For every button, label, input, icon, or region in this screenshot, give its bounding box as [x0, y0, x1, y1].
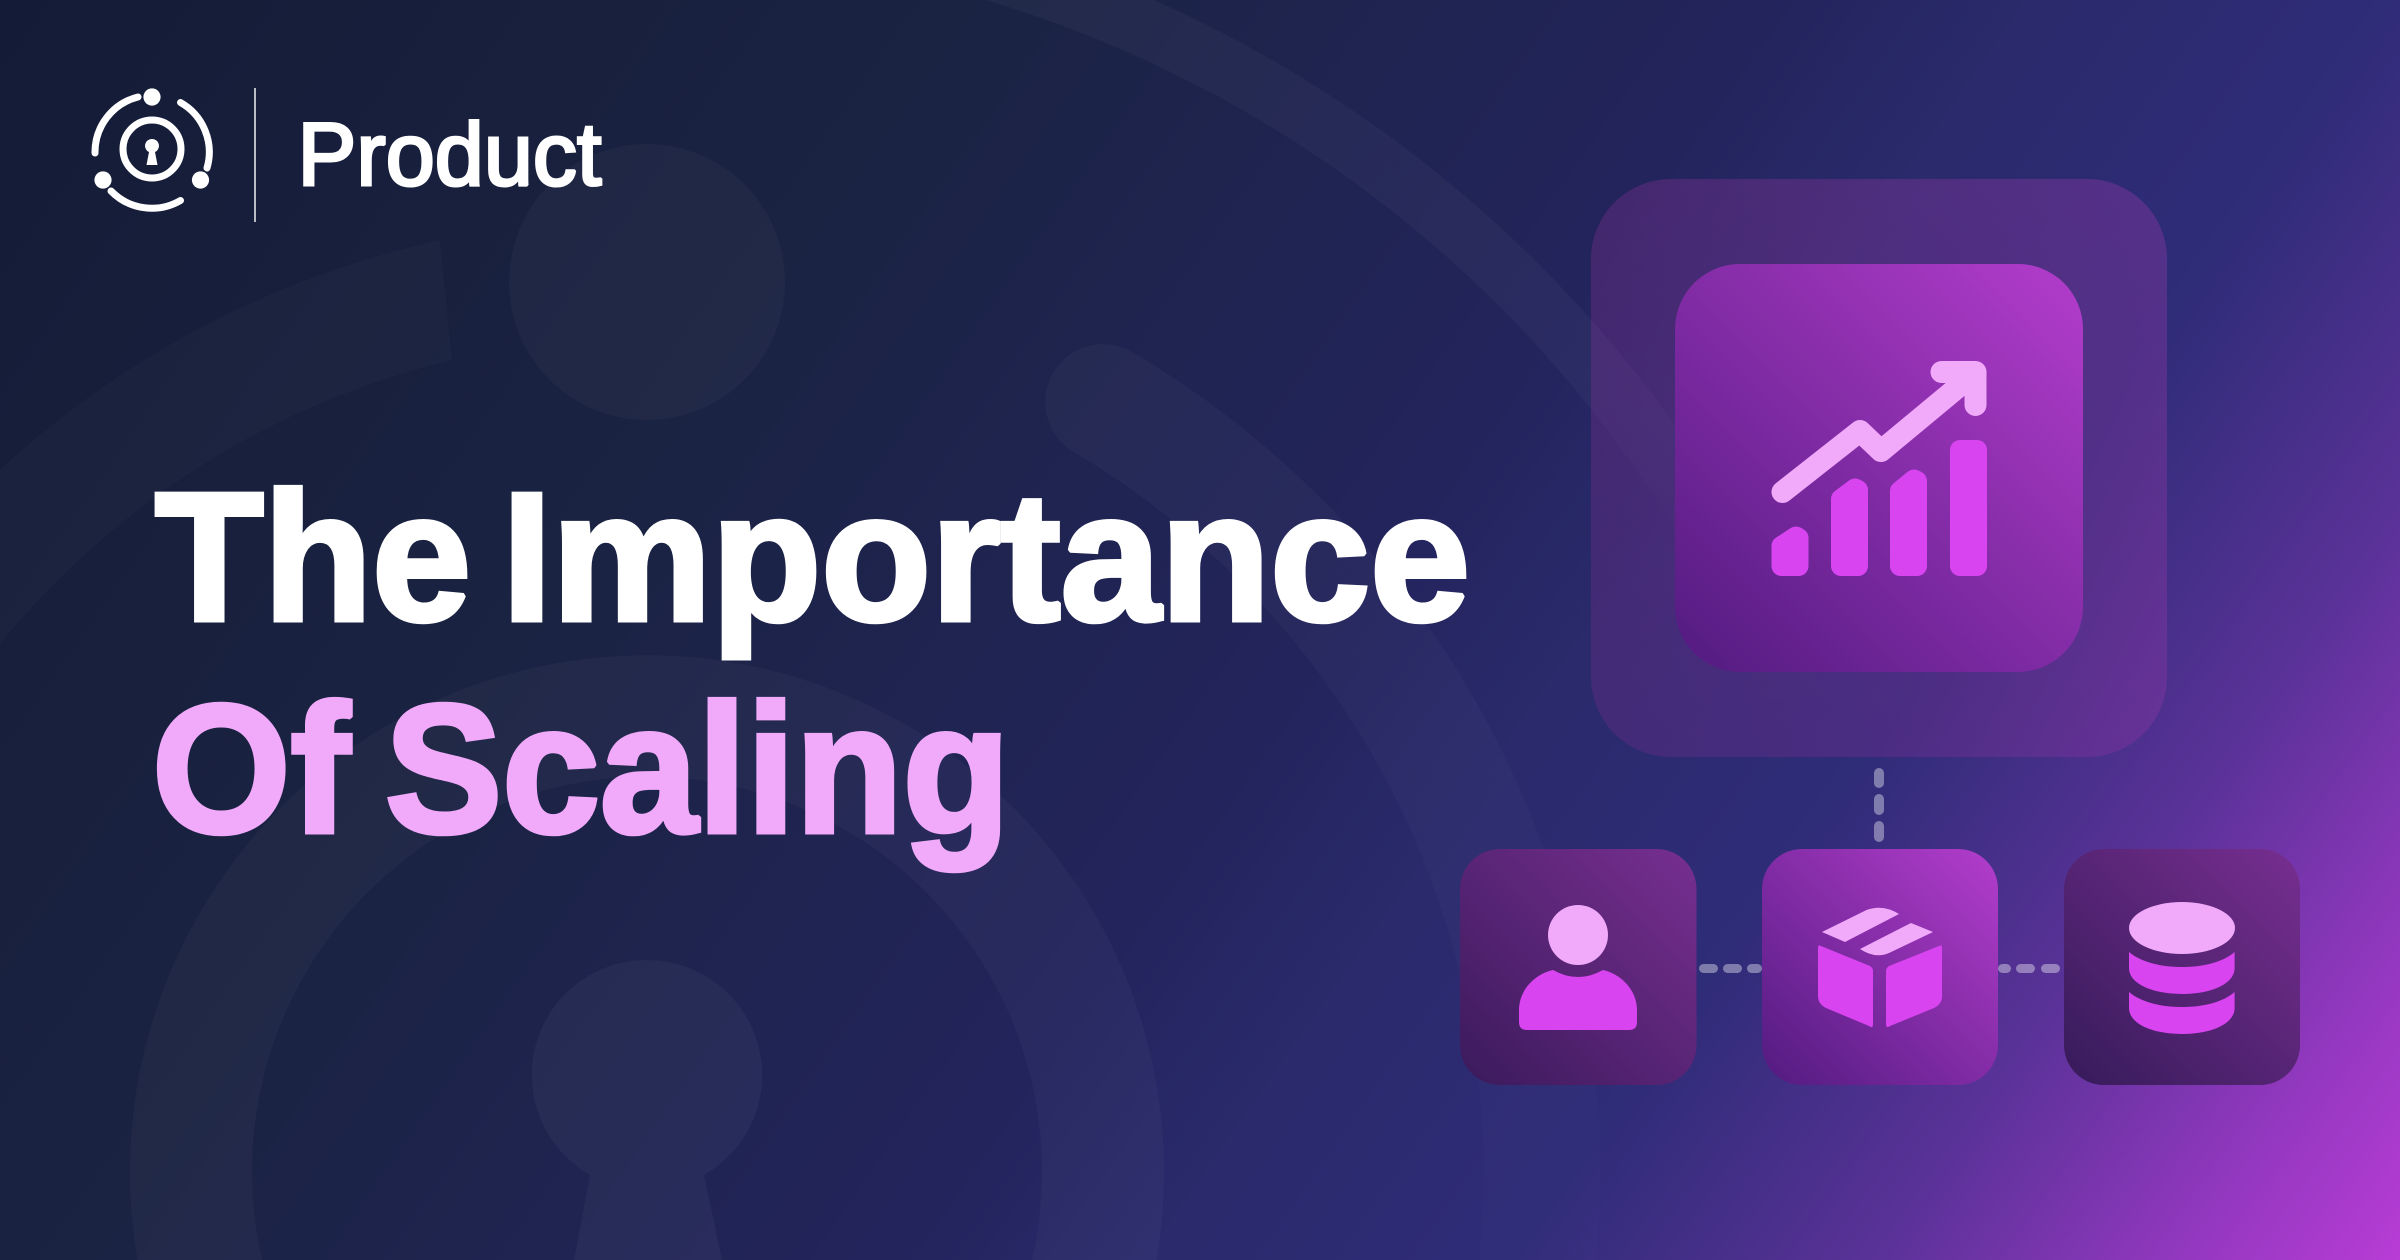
database lower discs	[2129, 952, 2235, 1034]
watermark outer arc	[986, 0, 1846, 760]
watermark right arc	[1045, 344, 1600, 1260]
panel: outer square	[1591, 179, 2167, 757]
icon: user	[1519, 905, 1637, 1030]
logo outer arcs	[95, 97, 209, 208]
user body	[1519, 970, 1637, 1030]
watermark inner ring	[130, 655, 1164, 1260]
panel: box tile	[1762, 849, 1998, 1085]
logo ring	[123, 120, 181, 178]
title	[152, 454, 1470, 871]
panel: chart tile	[1675, 264, 2083, 672]
icon: box	[1818, 908, 1942, 1027]
category label: Product: Product	[298, 104, 602, 204]
panel: database tile	[2064, 849, 2300, 1085]
logo dots	[94, 88, 209, 189]
connector: center to right	[1998, 964, 2060, 973]
title line 1: Importance	[502, 454, 1470, 659]
watermark top dot	[509, 144, 785, 420]
chart bars	[1782, 450, 1977, 566]
watermark left arc	[0, 240, 452, 644]
connector: top to center	[1874, 768, 1884, 842]
panel: user tile	[1460, 849, 1696, 1085]
box sides	[1818, 945, 1942, 1027]
chart arrow	[1782, 372, 1976, 492]
icon: growth chart	[1782, 372, 1977, 566]
title line 2: Scaling	[385, 666, 1010, 871]
watermark keyhole	[532, 960, 762, 1260]
connector: left to center	[1699, 964, 1762, 973]
user head	[1548, 905, 1608, 965]
database top disc	[2129, 902, 2235, 954]
icon: database	[2129, 902, 2235, 1034]
title line 2: Of	[152, 666, 351, 871]
watermark: large logo	[0, 0, 1846, 1260]
logo: keyhole ring mark	[94, 88, 209, 208]
logo divider	[254, 88, 256, 222]
logo keyhole	[145, 139, 159, 165]
box lid strips	[1822, 908, 1933, 955]
title line 1: The	[155, 454, 471, 659]
